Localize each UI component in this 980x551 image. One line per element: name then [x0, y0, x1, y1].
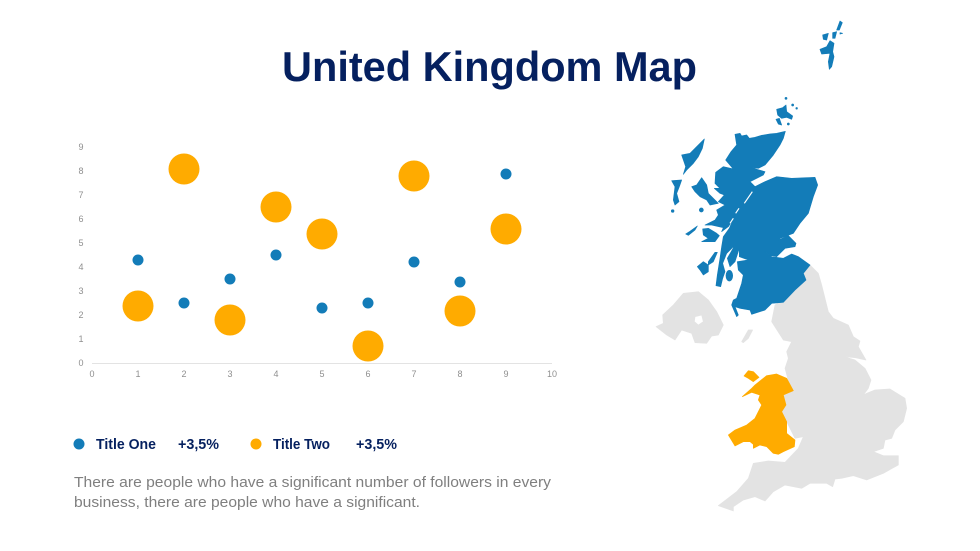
bubble chart [78, 142, 557, 379]
y axis labels: 6 [78, 214, 84, 224]
legend value: title two: +3,5% [356, 437, 397, 453]
legend value: title one: +3,5% [178, 437, 219, 453]
lochs [730, 192, 752, 223]
description text: There are people who have a significant number of followers in every [74, 474, 552, 491]
y axis labels: 8 [78, 166, 84, 176]
description text [74, 474, 552, 511]
region: Isle of Man [742, 330, 753, 343]
x axis labels: 3 [227, 369, 233, 379]
island: Jura [708, 252, 717, 265]
island: Tiree and Coll [686, 226, 697, 235]
legend label: title two: Title Two [273, 437, 330, 453]
x axis labels: 10 [547, 369, 557, 379]
island: Islay [697, 262, 708, 275]
x axis labels: 4 [273, 369, 279, 379]
y axis labels: 2 [78, 310, 84, 320]
island: Arran [726, 270, 733, 281]
x axis labels: 6 [365, 369, 371, 379]
island: Orkney [777, 105, 793, 119]
y axis labels: 7 [78, 190, 84, 200]
island: Skye [692, 178, 718, 205]
x axis labels: 2 [181, 369, 187, 379]
legend marker: title one [74, 438, 84, 450]
y axis labels [78, 142, 84, 368]
x axis labels: 7 [411, 369, 417, 379]
y axis labels: 1 [78, 334, 84, 344]
region: England [718, 265, 907, 511]
x axis labels: 8 [457, 369, 463, 379]
island: Lewis and Harris [682, 139, 704, 174]
island: Uists [672, 180, 682, 205]
y axis labels: 0 [78, 358, 84, 368]
island: Mull [702, 228, 719, 242]
region: Northern Ireland [656, 292, 723, 343]
legend label: title one: Title One [96, 437, 156, 453]
y axis labels: 9 [78, 142, 84, 152]
description text: business, there are people who have a significant. [74, 494, 420, 511]
y axis labels: 3 [78, 286, 84, 296]
title: United Kingdom Map [282, 43, 697, 90]
x axis labels: 9 [503, 369, 509, 379]
map of the United Kingdom [656, 21, 907, 511]
series: title one dots [132, 168, 512, 314]
x axis labels: 1 [135, 369, 141, 379]
region: Wales [728, 371, 795, 454]
x axis labels [89, 369, 557, 379]
legend marker: title two [250, 438, 262, 450]
y axis labels: 4 [78, 262, 84, 272]
y axis labels: 5 [78, 238, 84, 248]
x axis labels: 5 [319, 369, 325, 379]
x axis labels: 0 [89, 369, 95, 379]
region: Scotland [671, 21, 843, 317]
island: Shetland [820, 41, 834, 69]
series: title two bubbles [122, 154, 522, 362]
legend [74, 437, 397, 453]
